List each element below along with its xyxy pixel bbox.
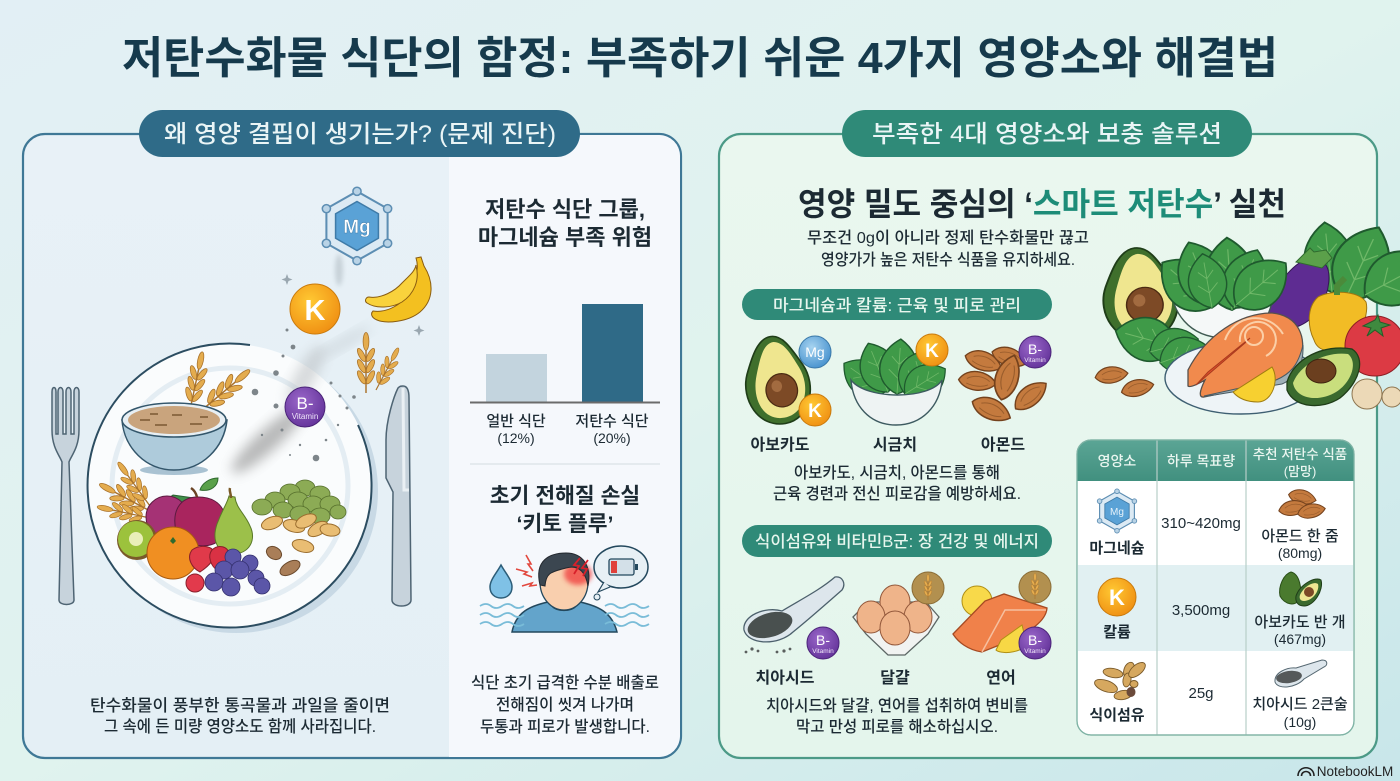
person <box>512 553 617 632</box>
badge: K: K <box>925 341 939 362</box>
food: almonds: 아몬드 <box>981 436 1025 454</box>
food: eggs: 달걀 <box>880 669 910 687</box>
table row: fiber: 식이섬유 <box>1089 707 1145 724</box>
subheading pill: muscle and fatigue: 마그네슘과 칼륨: 근육 및 피로 관리 <box>773 296 1021 315</box>
icon: wheat <box>356 333 405 394</box>
food: avocado <box>738 331 831 454</box>
badge: wheat <box>1019 571 1051 603</box>
text: fiber and vitamin B description: 막고 만성 피로를 해소하십시오. <box>796 718 998 736</box>
table header: (맘망) <box>1284 464 1316 479</box>
badge: B vitamin: Vitamin <box>812 648 834 655</box>
table row: magnesium: 아몬드 한 줌 <box>1261 528 1339 545</box>
heading: keto flu: 초기 전해질 손실 <box>490 484 640 508</box>
text: keto flu description <box>471 674 659 736</box>
icon: vitamin B badge <box>285 387 325 427</box>
icon: magnesium crystal: Mg <box>343 217 371 238</box>
pepper <box>1309 292 1367 351</box>
wheat stalks <box>95 457 157 527</box>
table row: potassium <box>1098 572 1346 647</box>
text: fiber and vitamin B description <box>766 697 1028 736</box>
bar chart: magnesium deficiency: (12%) <box>497 430 535 446</box>
nutrient loss dust trail <box>225 254 424 480</box>
right column background <box>449 135 680 757</box>
table row: potassium: (467mg) <box>1274 631 1326 647</box>
table header: 영양소 <box>1098 453 1136 469</box>
plate illustration <box>88 344 378 633</box>
icon: vitamin B badge: Vitamin <box>292 412 318 421</box>
small spinach <box>1110 310 1213 379</box>
heading: magnesium deficiency risk <box>478 197 652 250</box>
icon: fork <box>52 388 79 604</box>
text: plate caption: 탄수화물이 풍부한 통곡물과 과일을 줄이면 <box>90 696 390 715</box>
icon: pain sparks <box>516 555 537 586</box>
badge: wheat <box>912 572 944 604</box>
text: keto flu description: 두통과 피로가 발생합니다. <box>480 718 650 736</box>
table row: fiber: 25g <box>1188 685 1214 702</box>
mushrooms <box>1352 379 1400 409</box>
icon: magnesium crystal <box>322 187 392 265</box>
fruit group <box>117 478 270 596</box>
table header: 하루 목표량 <box>1167 453 1235 469</box>
heading pill: problem diagnosis <box>139 110 580 157</box>
table: nutrient targets <box>1077 440 1354 735</box>
badge: B vitamin: B- <box>1028 632 1042 648</box>
badge: B vitamin: Vitamin <box>1024 648 1046 655</box>
food: spinach <box>834 334 954 454</box>
badge: K: K <box>808 401 822 422</box>
speech bubble with low battery <box>594 546 648 600</box>
table row: fiber <box>1089 660 1348 730</box>
text: keto flu description: 전해짐이 씻겨 나가며 <box>496 696 634 714</box>
dark greens <box>1301 216 1400 318</box>
badge: Mg: Mg <box>805 344 825 360</box>
text: smart low-carb intro: 영양가가 높은 저탄수 식품을 유지하세요. <box>821 251 1075 269</box>
badge: B vitamin: Vitamin <box>1024 357 1046 364</box>
title: 저탄수화물 식단의 함정: 부족하기 쉬운 4가지 영양소와 해결법 <box>122 34 1278 83</box>
table row: potassium: K <box>1109 585 1125 610</box>
badge: B vitamin <box>1019 336 1051 368</box>
text: keto flu description: 식단 초기 급격한 수분 배출로 <box>471 674 659 692</box>
text: muscle and fatigue description <box>773 464 1021 503</box>
icon: potassium badge <box>290 284 340 334</box>
table row: magnesium: 마그네슘 <box>1089 540 1145 557</box>
food: chia seeds <box>744 577 844 687</box>
food: salmon <box>953 571 1051 687</box>
icon: potassium badge: K <box>305 295 326 327</box>
food: almonds <box>957 336 1052 454</box>
text: plate caption: 그 속에 든 미량 영양소도 함께 사라집니다. <box>104 717 376 736</box>
heading: keto flu: ‘키토 플루’ <box>516 512 614 536</box>
plate and salmon <box>1165 313 1317 414</box>
eggplant <box>1258 258 1329 330</box>
food: chia seeds: 치아시드 <box>756 669 815 687</box>
badge: B vitamin <box>807 627 839 659</box>
table row: fiber: 치아시드 2큰술 <box>1252 696 1348 713</box>
bowl of whole grains <box>122 350 256 475</box>
icon: knife <box>386 386 411 606</box>
badge: B vitamin: B- <box>816 632 830 648</box>
illustration: keto flu person <box>480 546 649 632</box>
food: avocado: 아보카도 <box>751 436 810 454</box>
text: fiber and vitamin B description: 치아시드와 달걀, 연어를 섭취하여 변비를 <box>766 697 1028 715</box>
text: smart low-carb intro <box>807 229 1089 269</box>
food: eggs <box>853 572 944 687</box>
illustration: healthy foods hero <box>1094 216 1400 414</box>
panel: nutrient solutions <box>719 110 1400 758</box>
table row: magnesium <box>1089 487 1339 561</box>
logo: NotebookLM: NotebookLM <box>1317 764 1393 779</box>
bar chart: magnesium deficiency: (20%) <box>593 430 631 446</box>
text: muscle and fatigue description: 아보카도, 시금치, 아몬드를 통해 <box>794 464 1000 482</box>
food: salmon: 연어 <box>986 669 1016 687</box>
badge: B vitamin <box>1019 627 1051 659</box>
text: smart low-carb intro: 무조건 0g이 아니라 정제 탄수화물만 끊고 <box>807 229 1089 247</box>
icon: banana <box>366 257 431 322</box>
heading: magnesium deficiency risk: 마그네슘 부족 위험 <box>478 225 652 250</box>
heading: magnesium deficiency risk: 저탄수 식단 그룹, <box>485 197 645 222</box>
table header: 추천 저탄수 식품 <box>1253 447 1347 462</box>
heading pill: solutions <box>842 110 1252 157</box>
heading: keto flu <box>490 484 640 536</box>
icon: vitamin B badge: B- <box>296 394 314 413</box>
spinach bowl <box>1147 234 1300 338</box>
tomato <box>1345 316 1400 376</box>
avocado half small <box>1287 348 1360 406</box>
bar chart: magnesium deficiency: 저탄수 식단 <box>575 413 649 430</box>
badge: B vitamin: B- <box>1028 341 1042 357</box>
icon: water drop <box>490 565 512 598</box>
table row: magnesium: Mg <box>1110 507 1124 518</box>
subheading pill: fiber and vitamin B <box>742 525 1052 557</box>
subheading pill: fiber and vitamin B: 식이섬유와 비타민B군: 장 건강 및 에너지 <box>755 532 1039 551</box>
table header <box>1098 447 1347 479</box>
almonds <box>1094 365 1155 399</box>
subheading pill: muscle and fatigue <box>742 289 1052 320</box>
heading pill: problem diagnosis: 왜 영양 결핍이 생기는가? (문제 진단) <box>164 121 556 148</box>
text: muscle and fatigue description: 근육 경련과 전신 피로감을 예방하세요. <box>773 485 1021 503</box>
table row: potassium: 아보카도 반 개 <box>1254 614 1346 631</box>
avocado half <box>1096 243 1183 345</box>
green legumes and beans <box>252 480 346 579</box>
table row: magnesium: (80mg) <box>1278 545 1322 561</box>
heading: smart low-carb: 영양 밀도 중심의 ‘스마트 저탄수’ 실천 <box>798 186 1286 222</box>
waves <box>480 604 649 626</box>
heading pill: solutions: 부족한 4대 영양소와 보충 솔루션 <box>872 121 1222 148</box>
food: spinach: 시금치 <box>873 436 917 454</box>
panel: problem diagnosis <box>23 110 681 758</box>
table row: potassium: 3,500mg <box>1172 602 1230 619</box>
table row: potassium: 칼륨 <box>1103 624 1131 641</box>
text: plate caption <box>90 696 390 736</box>
table row: magnesium: 310~420mg <box>1161 515 1241 532</box>
bar chart: magnesium deficiency <box>470 304 660 446</box>
table row: fiber: (10g) <box>1284 714 1316 730</box>
bar chart: magnesium deficiency: 얼반 식단 <box>486 413 546 430</box>
